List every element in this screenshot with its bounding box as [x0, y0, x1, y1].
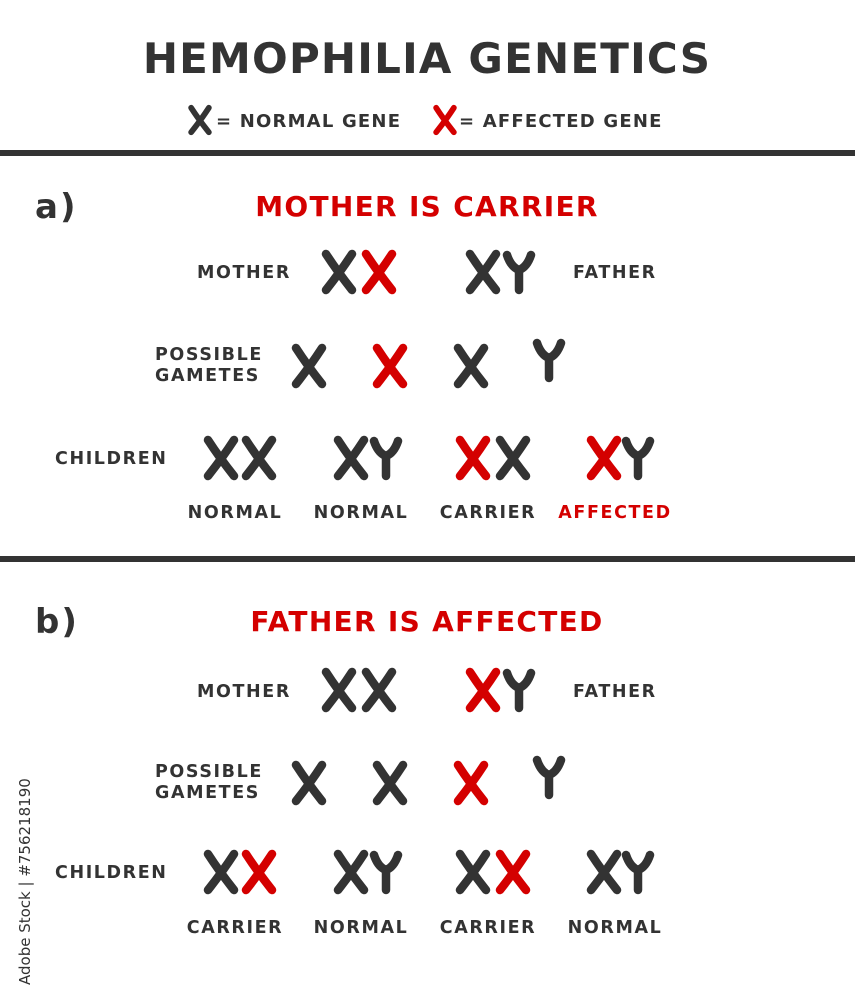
panel: b: CARRIER [187, 918, 283, 938]
watermark: Adobe Stock | #756218190 [16, 778, 34, 985]
panel: b: POSSIBLE [155, 762, 263, 782]
panel: b: FATHER [573, 682, 657, 702]
panel: b: CARRIER [440, 918, 536, 938]
panel: b: GAMETES [155, 783, 260, 803]
legend: = NORMAL GENE [216, 111, 401, 132]
panel: b [35, 602, 662, 938]
panel: a: POSSIBLE [155, 345, 263, 365]
panel: b: CHILDREN [55, 863, 168, 883]
label b: b) [35, 602, 79, 642]
title: HEMOPHILIA GENETICS [143, 34, 711, 83]
panel: b: MOTHER [197, 682, 291, 702]
panel: b: NORMAL [568, 918, 662, 938]
panel: a: GAMETES [155, 366, 260, 386]
panel: a: MOTHER [197, 263, 291, 283]
legend: = AFFECTED GENE [459, 111, 663, 132]
panel: a: AFFECTED [558, 503, 672, 523]
panel: b: NORMAL [314, 918, 408, 938]
heading b: FATHER IS AFFECTED [250, 605, 604, 638]
panel: a: CHILDREN [55, 449, 168, 469]
panel: a: CARRIER [440, 503, 536, 523]
panel: a: NORMAL [188, 503, 282, 523]
panel: a: FATHER [573, 263, 657, 283]
panel: a: NORMAL [314, 503, 408, 523]
panel: a [35, 187, 672, 523]
heading a: MOTHER IS CARRIER [255, 190, 599, 223]
legend [191, 108, 663, 132]
label a: a) [35, 187, 77, 227]
